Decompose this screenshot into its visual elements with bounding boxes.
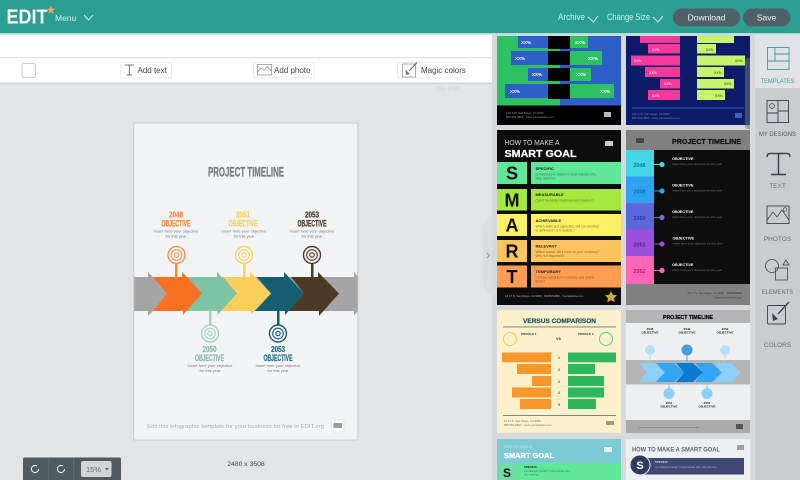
milestone: 2053 brown: Insert here your objective [290, 228, 335, 234]
row S: Is it defined in detail? It must include who, [536, 172, 597, 176]
panel collapse handle [483, 214, 492, 296]
milestone: 2051 yellow: 2051 [236, 210, 250, 220]
template: blue green bars: XX% [576, 72, 586, 77]
chevron: orange [153, 272, 202, 315]
row M: Can it be easily measured and tracked? [536, 198, 594, 202]
template: blue green bars: XX% [600, 89, 610, 94]
milestone: 2053 brown: 2053 [305, 210, 319, 220]
row A: A [506, 216, 518, 236]
milestone: 2051 yellow: Insert here your objective [222, 228, 267, 234]
step 2052: Insert here your objective for this year [672, 268, 722, 272]
milestone: 2048 orange: 2048 [169, 210, 183, 220]
document page: project timeline [134, 123, 358, 440]
tab: photos: PHOTOS [764, 236, 792, 243]
step 2048: 2048 [633, 163, 646, 169]
template: blue green bars: XX% [521, 40, 531, 45]
download button [673, 8, 740, 26]
milestone: 2048 orange [154, 210, 199, 278]
row A: ACHIEVABLE [536, 218, 562, 223]
step 2049: OBJECTIVE [672, 184, 694, 188]
row A: to achieve it? Is it realistic? [536, 228, 575, 232]
template: smart goal teal (cropped): SPECIFIC [524, 465, 537, 469]
step 2048 [626, 150, 722, 176]
magic colors button: Magic colors [421, 66, 466, 75]
milestone: 2053 teal: for this year [268, 368, 289, 373]
orange bars [502, 352, 551, 409]
tab: templates (active) [755, 35, 800, 88]
row T: Can you establish it concrete and define [536, 276, 594, 280]
row S: why, and how. [536, 176, 556, 180]
top header bar [0, 0, 800, 34]
template: project timeline light: 2048 [647, 327, 654, 331]
step 2048: Insert here your objective for this year [672, 162, 722, 166]
template: project timeline light: OBJECTIVE [660, 404, 678, 408]
pins [645, 344, 730, 399]
faint watermark note: sky-wait [436, 86, 460, 92]
template: versus comparison: PROFILE 1 [521, 332, 537, 336]
milestone: 2053 brown: OBJECTIVE [298, 218, 326, 228]
template: project timeline light: OBJECTIVE [678, 330, 696, 334]
template: versus comparison: 3 [558, 380, 560, 384]
editing toolbar [0, 34, 492, 84]
icon: undo [31, 465, 39, 473]
template: blue green bars: XX% [575, 40, 585, 45]
milestone: 2050 green [188, 310, 233, 373]
milestone: 2053 brown: for this year [302, 234, 323, 238]
milestone: 2048 orange: OBJECTIVE [162, 218, 190, 228]
template: smart goal black: SMART GOAL [504, 148, 577, 160]
row A: Which skills and capacities will you develop [536, 224, 599, 228]
milestone: 2053 teal: Insert here your objective [256, 363, 301, 368]
template: blue green bars: XX% [515, 56, 525, 61]
template: versus comparison: 888-555-8899 · www.yourwebsite.com [504, 423, 552, 427]
tab: text: TEXT [769, 183, 786, 190]
template: navy pink bars: XX% [649, 71, 658, 75]
milestone: 2051 yellow [222, 210, 267, 278]
tab: elements [762, 260, 794, 296]
logo: EDIT [6, 6, 48, 28]
template: navy pink bars: XX% [652, 94, 661, 98]
chevron: green [186, 272, 237, 315]
template: navy pink bars: XX% [706, 48, 715, 52]
chevron: brown [288, 272, 339, 316]
add photo button [254, 62, 314, 78]
tab: my designs [759, 100, 797, 138]
save button: Save [757, 12, 776, 22]
template: navy pink bars: 149 S.W. San Diego, CA 9000 [632, 112, 670, 116]
milestone: 2050 green: 2050 [202, 345, 217, 354]
tab: colors [764, 302, 792, 349]
change size dropdown: Change Size [607, 12, 650, 22]
step 2049: Insert here your objective for this year [672, 188, 722, 192]
row M: MEASURABLE [536, 192, 564, 197]
template: project timeline dark: 16 17 N. San Diego, CA 9000 · 8005551899 [687, 291, 742, 295]
template: versus comparison: 4 [558, 391, 560, 395]
row A [497, 214, 621, 236]
arrow band [134, 272, 358, 316]
template: project timeline light: OBJECTIVE [698, 404, 716, 408]
step 2050: Insert here your objective for this year [672, 215, 722, 219]
menu dropdown: Menu [55, 13, 77, 23]
template: blue green bars: 149 S.W. San Diego, CA 9000 [506, 111, 544, 115]
template: navy pink bars [626, 36, 750, 125]
template: navy pink bars: 888-555-8899 · www.yourwebsite.com [632, 116, 680, 120]
template: blue green bars [497, 36, 621, 125]
grey barbs [148, 272, 358, 316]
menu dropdown [55, 13, 93, 23]
milestone: 2050 green: OBJECTIVE [195, 353, 224, 363]
page footer note [147, 420, 344, 432]
canvas background [0, 34, 492, 480]
template: project timeline light: PROJECT TIMELINE [663, 315, 714, 321]
row T: times? [536, 280, 545, 284]
template: versus comparison: 5 [558, 403, 560, 407]
template: navy pink bars: XX% [714, 71, 723, 75]
template: project timeline light: 2049 [684, 327, 691, 331]
milestone: 2053 teal: 2053 [271, 345, 285, 354]
row M: M [504, 190, 520, 210]
template: smart goal teal (cropped): Is it defined in detail? It must include who, [524, 470, 571, 473]
row R [497, 240, 621, 262]
template: project timeline light [626, 310, 750, 433]
row S: SPECIFIC [536, 166, 554, 171]
tab: my designs: MY DESIGNS [759, 131, 797, 138]
magic colors button [398, 62, 468, 78]
template: smart goal teal (cropped): why, and how. [524, 474, 540, 476]
tab: colors: COLORS [764, 342, 792, 349]
row R: Which impact will it have on your company? [536, 250, 600, 254]
milestone: 2053 brown [290, 210, 335, 278]
template: project timeline light: 2052 [704, 401, 711, 405]
template: smart goal light (cropped) [626, 439, 750, 480]
save button [743, 8, 790, 26]
right sidebar [750, 35, 800, 480]
template: navy pink bars: XX% [735, 59, 744, 63]
row R: R [506, 242, 518, 262]
tab: elements: ELEMENTS [762, 289, 794, 296]
template: versus comparison: VS [556, 337, 561, 341]
template: smart goal teal (cropped): HOW TO MAKE A [504, 445, 533, 449]
zoom controls [23, 458, 121, 480]
template: versus comparison: VERSUS COMPARISON [523, 318, 596, 325]
tab: templates (active): TEMPLATES [760, 78, 795, 85]
row R: Why is it important? [536, 254, 565, 258]
template: smart goal light (cropped): S [636, 460, 644, 472]
template: blue green bars: XX% [510, 89, 520, 94]
chevron: teal [254, 272, 304, 315]
milestone: 2050 green: for this year [200, 368, 221, 373]
template: smart goal black: HOW TO MAKE A [504, 140, 560, 147]
template: navy pink bars: XX% [652, 48, 661, 52]
template: project timeline light: OBJECTIVE [716, 330, 734, 334]
step 2049: 2049 [633, 190, 646, 196]
template: project timeline dark: www.yourwebsite.com [714, 296, 743, 300]
row M [497, 189, 621, 210]
template: versus comparison: 2 [558, 368, 560, 372]
step 2050: 2050 [633, 216, 646, 222]
row T: T [506, 267, 518, 287]
template: blue green bars: 888-555-8899 · www.yourwebsite.com [506, 115, 554, 119]
template: smart goal light (cropped): SPECIFIC [655, 460, 668, 464]
template: smart goal teal (cropped): SMART GOAL [504, 451, 554, 460]
step 2049 [626, 176, 722, 203]
milestone: 2053 teal [256, 310, 301, 373]
icon: redo [57, 465, 65, 473]
step 2051: 2051 [633, 242, 646, 248]
page footer note: Edit this infographic template for your business for free in EDIT.org [147, 424, 324, 430]
template: versus comparison: PROFILE 2 [578, 332, 594, 336]
step 2052: 2052 [633, 269, 646, 275]
add text button [120, 62, 172, 78]
template gallery panel [483, 35, 755, 480]
checkbox [22, 64, 36, 78]
template: project timeline light: 2051 [666, 401, 673, 405]
template: project timeline dark [626, 130, 750, 305]
template: smart goal light (cropped): Is it defined in detail? It must include who, why and how. [655, 466, 717, 469]
template: project timeline light: 2050 [722, 327, 729, 331]
template: blue green bars: XX% [588, 56, 598, 61]
template: navy pink bars: XX% [634, 59, 643, 63]
template: smart goal black: 16 17 N. San Diego, CA 9000 · 8005551899 · Yourwebsite.com [505, 294, 584, 298]
template: navy pink bars: XX% [724, 82, 733, 86]
template: smart goal teal (cropped) [497, 439, 621, 480]
add photo button: Add photo [274, 66, 311, 75]
chevron: yellow [219, 272, 271, 315]
milestone: 2048 orange: for this year [166, 234, 187, 238]
gallery scrollbar [745, 58, 754, 129]
milestone: 2051 yellow: for this year [234, 234, 255, 238]
row R: RELEVANT [536, 244, 557, 248]
milestone: 2048 orange: Insert here your objective [154, 228, 199, 234]
template: navy pink bars: XX% [664, 82, 673, 86]
template: project timeline dark: PROJECT TIMELINE [672, 139, 741, 146]
template: navy pink bars: XX% [715, 94, 724, 98]
row S: S [506, 164, 518, 184]
step 2051: OBJECTIVE [672, 236, 694, 240]
page size label: 2480 x 3508 [227, 461, 265, 468]
blue chevrons [639, 363, 741, 382]
row T [497, 266, 621, 288]
template: project timeline light: OBJECTIVE [641, 330, 659, 334]
step 2048: OBJECTIVE [672, 157, 694, 161]
milestone: 2050 green: Insert here your objective [188, 363, 233, 368]
template: versus comparison [497, 310, 621, 433]
download button: Download [688, 12, 726, 22]
template: blue green bars: XX% [532, 72, 542, 77]
step 2051 [626, 230, 723, 256]
step 2052 [626, 256, 722, 284]
add text button: Add text [138, 66, 168, 75]
tab: photos [764, 206, 792, 243]
row T: TEMPORARY [536, 269, 561, 274]
green bars [568, 352, 616, 409]
milestone: 2051 yellow: OBJECTIVE [228, 218, 258, 228]
zoom value: 15% [86, 465, 101, 474]
tab: text [767, 154, 790, 190]
step 2052: OBJECTIVE [672, 263, 694, 267]
step 2050 [626, 203, 722, 230]
step 2050: OBJECTIVE [672, 210, 694, 214]
template: versus comparison: 16 17 N. San Diego, CA 9000 [504, 419, 541, 423]
template: smart goal teal (cropped): S [503, 466, 511, 480]
template: smart goal black [497, 130, 621, 305]
milestone: 2053 teal: OBJECTIVE [264, 353, 292, 363]
row S [497, 162, 621, 184]
template: versus comparison: 1 [558, 356, 560, 360]
page title: PROJECT TIMELINE [208, 164, 284, 180]
step 2051: Insert here your objective for this year [672, 242, 723, 246]
archive dropdown: Archive [558, 12, 585, 22]
template: smart goal light (cropped): HOW TO MAKE A SMART GOAL [632, 448, 720, 454]
